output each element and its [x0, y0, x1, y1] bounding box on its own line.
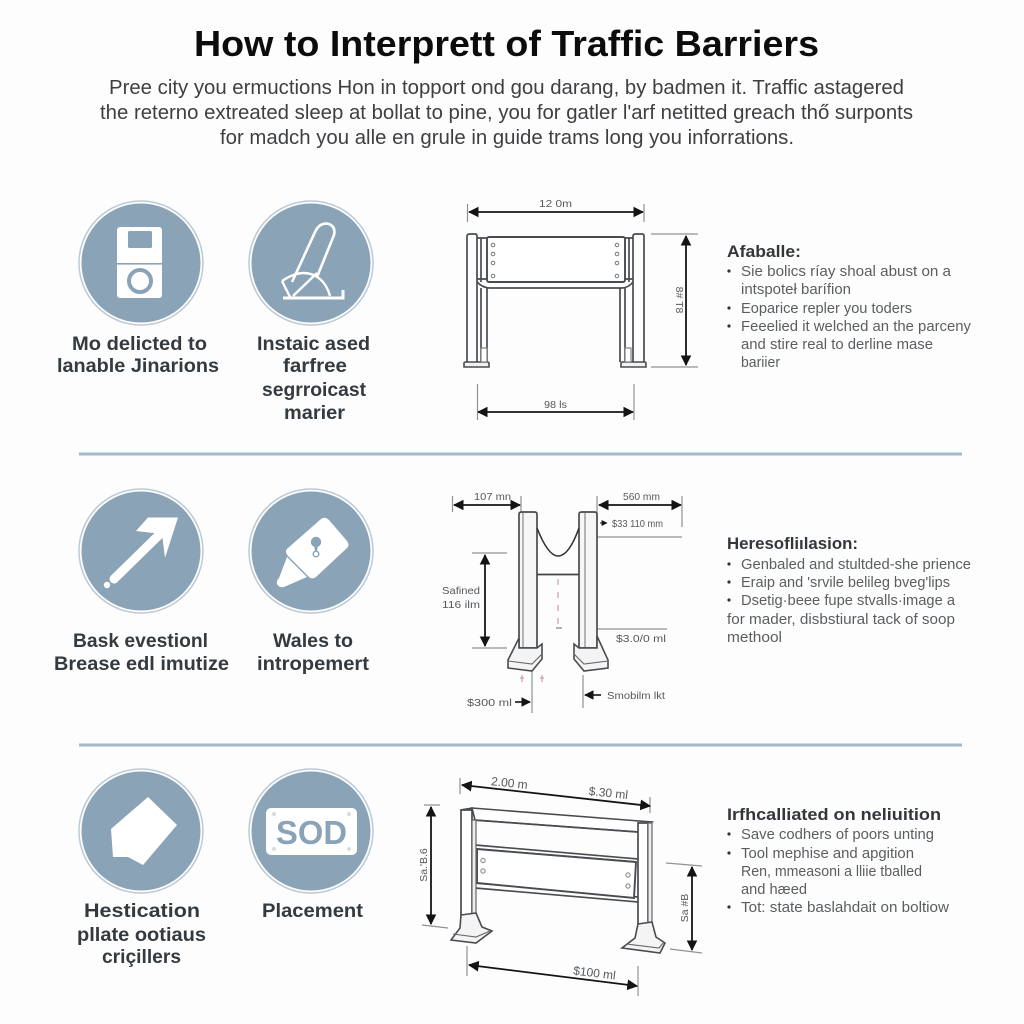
- icon: SOD plate: SOD: [276, 814, 347, 851]
- diagram: bollard posts: $300 ml: [467, 697, 512, 709]
- diagram: perspective barrier: Sa #B: [679, 894, 691, 922]
- diagram: bollard posts: 116 ilm: [442, 599, 480, 611]
- dimension arrows: [454, 505, 681, 702]
- label: icon 5: Hestication: [84, 900, 200, 922]
- diagram: perspective barrier: $100 ml: [572, 963, 617, 983]
- label: icon 2: Instaic ased: [257, 333, 370, 355]
- text block: row 1 notes: bariier: [741, 355, 780, 371]
- diagram: bollard posts: 560 mm: [623, 491, 660, 503]
- diagram: front barrier: [464, 198, 698, 420]
- text block: row 1 notes: Sie bolics ríay shoal abust on a: [741, 264, 952, 280]
- diagram: perspective barrier: 2.00 m: [490, 774, 528, 792]
- text block: row 3 notes: Save codhers of poors unting: [741, 827, 934, 843]
- diagram: front barrier: 8# T8: [673, 287, 685, 313]
- text block: row 3 notes: Tot: state baslahdait on boltiow: [741, 900, 950, 916]
- label: icon 1: [57, 333, 219, 377]
- text block: row 1 notes: Feeelied it welched an the parceny: [741, 319, 972, 335]
- intro text block: [100, 76, 913, 149]
- label: icon 4: Wales to: [273, 630, 353, 652]
- text block: row 2 notes: for mader, disbstiural tack of soop: [727, 612, 955, 628]
- text block: row 3 notes: Irfhcalliated on neliuition: [727, 805, 941, 824]
- text block: row 2 notes: [727, 534, 971, 646]
- dimension arrows: [469, 212, 686, 412]
- diagram: front barrier: 12 0m: [539, 198, 572, 210]
- intro text block: for madch you alle en grule in guide trams long you inforrations.: [220, 126, 794, 149]
- label: icon 3: [54, 630, 229, 675]
- dimension arrows: [431, 785, 692, 986]
- label: icon 5: [77, 900, 206, 968]
- text block: row 1 notes: and stire real to derline mase: [741, 337, 933, 353]
- text block: row 2 notes: methool: [727, 630, 782, 646]
- label: icon 4: intropemert: [257, 653, 370, 675]
- diagram: front barrier: 98 ls: [544, 399, 567, 411]
- intro text block: the reterno extreated sleep at bollat to pine, you for gatler l'arf netitted greach thő surponts: [100, 101, 913, 124]
- text block: row 1 notes: Eoparice repler you toders: [741, 301, 912, 317]
- panel: row 2: [54, 489, 971, 713]
- text block: row 2 notes: Heresofliılasion:: [727, 534, 858, 553]
- label: icon 2: marier: [284, 402, 345, 424]
- icon: diagonal arrow: [79, 489, 203, 613]
- diagram: perspective barrier: $.30 ml: [588, 784, 629, 802]
- label: icon 3: Bask evestionl: [73, 630, 208, 652]
- label: icon 4: [257, 630, 370, 675]
- text block: row 3 notes: Ren, mmeasoni a lliie tballed: [741, 864, 922, 880]
- label: icon 5: pllate ootiaus: [77, 924, 206, 946]
- label: icon 1: Mo delicted to: [72, 333, 207, 355]
- label: icon 6: Placement: [262, 900, 364, 922]
- intro text block: Pree city you ermuctions Hon in topport ond gou darang, by badmen it. Traffic astagered: [109, 76, 904, 99]
- label: icon 5: criçillers: [102, 946, 181, 968]
- diagram: bollard posts: [442, 491, 682, 713]
- text block: row 1 notes: [727, 242, 972, 371]
- panel: row 3: [77, 769, 950, 996]
- diagram: bollard posts: Safined: [442, 585, 480, 597]
- text block: row 2 notes: Genbaled and stultded-she prience: [741, 557, 971, 573]
- text block: row 1 notes: intspoteł barífion: [741, 282, 851, 298]
- diagram: perspective barrier: [418, 774, 702, 996]
- diagram: bollard posts: 107 mn: [474, 491, 511, 503]
- label: icon 2: segrroicast: [262, 379, 366, 401]
- icon: marker pen: [249, 489, 373, 613]
- label: icon 2: [257, 333, 370, 424]
- diagram: bollard posts: $3.0/0 ml: [616, 633, 666, 645]
- text block: row 3 notes: and hæed: [741, 882, 807, 898]
- label: icon 2: farfree: [283, 355, 347, 377]
- text block: row 2 notes: Eraip and 'srvile belileg bveg'lips: [741, 575, 950, 591]
- diagram: bollard posts: Smobilm lkt: [607, 690, 665, 702]
- label: icon 3: Brease edl imutize: [54, 653, 229, 675]
- panel: row 1: [57, 198, 972, 424]
- icon: paddle tool: [249, 201, 373, 325]
- icon: polygon shape: [79, 769, 203, 893]
- text block: row 3 notes: Tool mephise and apgition: [741, 846, 914, 862]
- label: icon 1: lanable Jinarions: [57, 355, 219, 377]
- icon: SOD plate: [249, 769, 373, 893]
- diagram: perspective barrier: Sa.'B.6: [418, 848, 430, 882]
- text block: row 2 notes: Dsetig·beee fupe stvalls·image a: [741, 593, 956, 609]
- diagram: bollard posts: $33 110 mm: [612, 518, 663, 530]
- text block: row 3 notes: [727, 805, 950, 916]
- title: How to Interprett of Traffic Barriers: [194, 23, 819, 64]
- text block: row 1 notes: Afaballe:: [727, 242, 801, 261]
- icon: device: [79, 201, 203, 325]
